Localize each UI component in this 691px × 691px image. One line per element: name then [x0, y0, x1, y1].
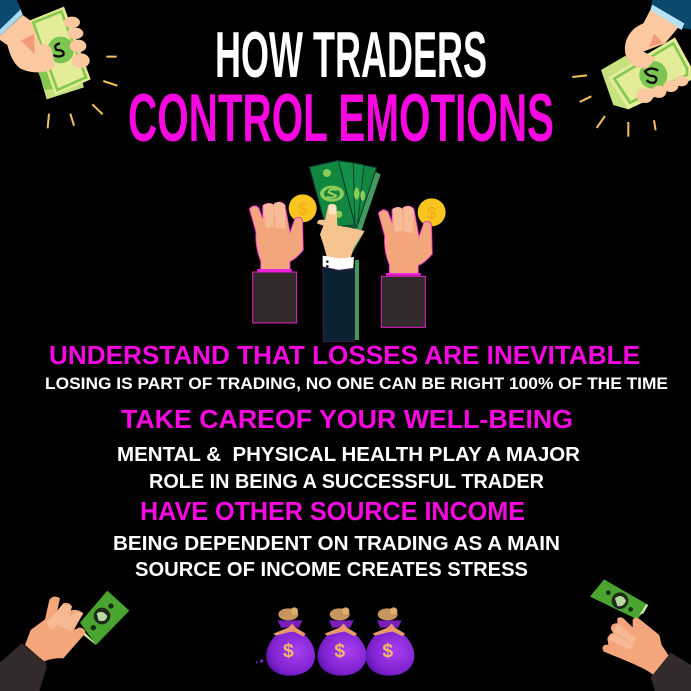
icon: hand holding cash top left: [0, 0, 117, 128]
section: well-being: ROLE IN BEING A SUCCESSFUL TRADER: [149, 471, 545, 493]
money bag 3: $: [382, 641, 393, 662]
section: other income: [113, 496, 560, 581]
section: well-being: TAKE CAREOF YOUR WELL-BEING: [121, 404, 573, 434]
title: [128, 18, 554, 156]
icon: hand holding banknote bottom left: [0, 591, 129, 691]
money bag 2: $: [334, 641, 345, 662]
section: understand losses: LOSING IS PART OF TRADING, NO ONE CAN BE RIGHT 100% OF THE TIME: [45, 374, 668, 393]
icon: hand holding cash top right: [572, 0, 691, 137]
money bag 3: [366, 607, 414, 676]
money bag 1: $: [283, 641, 294, 662]
icon: money bags: [256, 607, 414, 676]
right hand with coin: $: [427, 204, 436, 223]
money bag 1: [266, 607, 315, 676]
centre hand with banknotes: [309, 160, 381, 342]
section: understand losses: UNDERSTAND THAT LOSSES ARE INEVITABLE: [49, 340, 640, 370]
section: other income: HAVE OTHER SOURCE INCOME: [140, 496, 525, 526]
money bag 2: [318, 607, 366, 676]
right hand with coin: [378, 198, 446, 327]
section: understand losses: [45, 340, 668, 393]
section: other income: SOURCE OF INCOME CREATES STRESS: [135, 559, 528, 581]
left hand with coin: [249, 194, 317, 323]
section: well-being: [117, 404, 581, 493]
section: other income: BEING DEPENDENT ON TRADING AS A MAIN: [113, 533, 560, 555]
icon: three hands with money and coins: [249, 160, 446, 342]
left hand with coin: $: [298, 200, 307, 219]
section: well-being: MENTAL & PHYSICAL HEALTH PLAY A MAJOR: [117, 444, 581, 466]
icon: hand holding banknote bottom right: [590, 579, 691, 691]
